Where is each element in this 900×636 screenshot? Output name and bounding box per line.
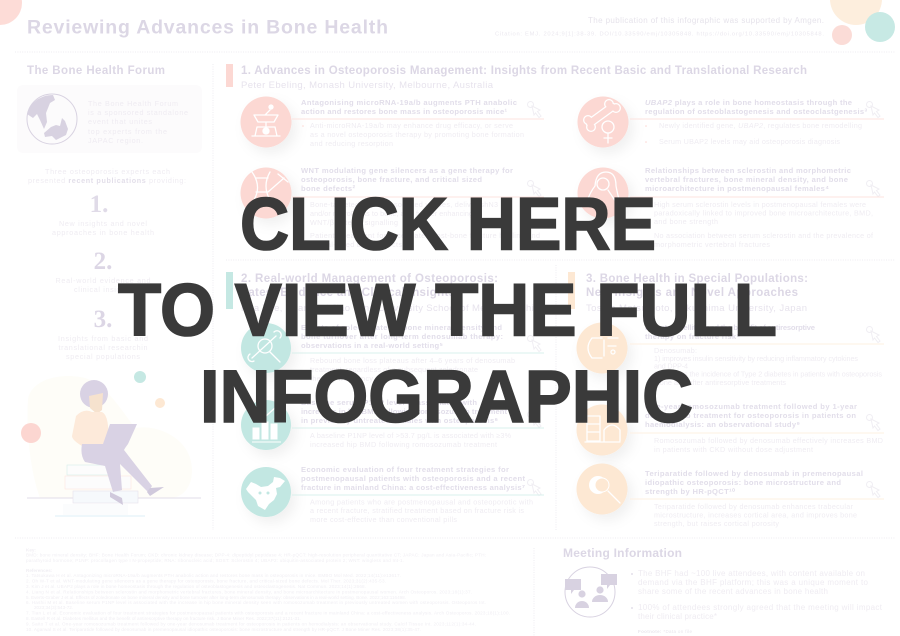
card: economic evaluation: Among patients who are postmenopausal and osteoporotic with: [310, 498, 533, 506]
card: UBAP2: UBAP2 plays a role in bone homeostasis through the: [645, 98, 852, 107]
card: WNT modulating gene silencers: [240, 166, 544, 249]
card: zoledronate: therapy frequency: [310, 374, 373, 383]
key and references: 1. Tatsukawa H et al. Antagonizing microRNA-19a/b augments PTH anabolic action and restores bone mass in osteoporosis in mice. EMBO Mol Med. 2022;14(11):e13617.: [26, 573, 401, 578]
card: teriparatide: strength by HR-pQCT¹⁰: [645, 487, 736, 496]
list item 3: translational researchin: [58, 343, 148, 352]
list item 1: 1.: [90, 191, 108, 218]
card: diabetes: [576, 322, 884, 387]
section 3 heading: New Insights and Novel Approaches: [586, 287, 798, 299]
call to action overlay: INFOGRAPHIC: [200, 355, 693, 438]
card: WNT modulating gene silencers: critical-sized bone defects: [310, 240, 402, 249]
card: diabetes: Diabetes mellitus and the benefit of antiresorptive: [645, 323, 815, 332]
card: romosozumab: [576, 402, 884, 456]
card: diabetes: alone and after antiresorptive treatments: [654, 378, 786, 387]
card: diabetes: 2) reduces the incidence of Type 2 diabetes in patients with osteoporosis: [654, 370, 882, 378]
card: zoledronate: Effects of zoledronate on bone mineral density and: [301, 323, 502, 332]
card: economic evaluation: Economic evaluation of four treatment strategies for: [301, 465, 509, 474]
icon: attendees with speech bubbles: [565, 567, 617, 617]
forum description: event that unites: [88, 117, 152, 126]
key and references: References:: [26, 568, 53, 573]
section 3 heading: 3. Bone Health in Special Populations:: [586, 273, 808, 285]
meeting bullets: The BHF had ~100 live attendees, with content available on: [638, 569, 865, 578]
support statement and citation: Citation: EMJ. 2024;9[1]:38-39. DOI/10.33590/emj/10305848. https://doi.org/10.33590/emj/10305848.: [495, 32, 824, 38]
list item 2: clinical insights: [74, 285, 132, 294]
card: WNT modulating gene silencers: Bone-targeted adeno-associated viruses, deliver shN3: [310, 200, 498, 209]
card: teriparatide: strength, but raises cortical porosity: [654, 519, 779, 528]
card: teriparatide: Teriparatide followed by denosumab enhances trabecular: [654, 502, 854, 511]
card: sclerostin: vertebral fractures, bone mineral density, and bone: [645, 175, 848, 184]
forum description: top experts from the: [88, 127, 167, 136]
card: diabetes: and DPP-4: [654, 362, 688, 370]
card: zoledronate: [241, 323, 544, 383]
forum description: JAPAC region.: [88, 136, 143, 145]
card: microRNA-19a/b: and reducing resorption: [310, 139, 393, 148]
call to action overlay: [118, 182, 777, 438]
key and references: 4. Liang N et al. Relationships between sclerostin and morphometric vertebral fractures, bone mineral density, and bone microarchitecture in postmenopausal women. Arch Osteoporos. 2023;18(1):37.: [26, 590, 472, 594]
panel: section 1 advances in osteoporosis management: [226, 64, 884, 249]
card: sclerostin: [578, 166, 884, 249]
card: diabetes: therapy on fracture risk⁸: [645, 332, 740, 341]
meeting bullets: their clinical practice*: [638, 612, 717, 621]
card: romosozumab: Romosozumab followed by denosumab effectively increases BMD: [654, 436, 883, 445]
card: teriparatide: microstructure, increases cortical area, and improves bone: [654, 510, 857, 520]
card: UBAP2: Serum UBAP2 levels may aid osteoporosis diagnosis: [659, 137, 840, 146]
card: romosozumab: in patients with CKD without dose adjustment: [654, 445, 813, 454]
card: zoledronate: bone turnover after long-term denosumab therapy:: [301, 332, 503, 341]
card: diabetes: 1) improves insulin sensitivity by reducing inflammatory cytokines: [654, 354, 858, 363]
key and references: 8. Eastell R et al. Diabetes mellitus and the benefit of antiresorptive therapy on fracture risk. J Bone Miner Res. 2022;37(11):2121-31.: [26, 616, 301, 621]
card: economic evaluation: postmenopausal patients with osteoporosis and a recent: [301, 474, 525, 483]
card: WNT modulating gene silencers: bone defects²: [301, 184, 355, 193]
card: microRNA-19a/b: Anti-microRNA-19a/b may enhance drug efficacy, or serve: [310, 121, 513, 130]
icon: bone with female symbol: [584, 100, 620, 143]
heading: meeting information: Meeting Information: [563, 546, 682, 560]
list item 3: special populations: [66, 352, 140, 361]
section 2 speaker: Hua Yue, Shanghai Jiao Tong University School of Medicine, China: [241, 303, 546, 314]
forum description: [88, 99, 188, 145]
intro text: Three osteoporosis experts each: [45, 167, 170, 176]
key and references: 10. Agarwal S et al. Teriparatide followed by denosumab in premenopausal idiopathic osteoporosis: bone microstructure and strength by HR-pQCT. J Bone Miner Res. 2023;38(1):35-47.: [26, 627, 421, 632]
key and references: BMD: bone mineral density; BHF: Bone Health Forum; CKD: chronic kidney disease; DPP-4: dipeptidyl peptidase 4; HR-pQCT: high-resolution peripheral quantitative CT; JAPAC: Japan and Asia-Pacific; PTH:: [26, 552, 486, 558]
card: teriparatide: idiopathic osteoporosis: bone microstructure and: [645, 478, 841, 487]
card: WNT modulating gene silencers: WNT modulating gene silencers as a gene therapy for: [301, 166, 513, 175]
card: sclerostin: High serum sclerostin levels in postmenopausal females were: [654, 200, 866, 209]
list item 2: Real-world evidence and: [56, 276, 150, 285]
section 1 heading: 1. Advances in Osteoporosis Management: Insights from Recent Basic and Translational Research: [241, 65, 807, 77]
card: sclerostin: Relationships between sclerostin and morphometric: [645, 166, 851, 175]
card: P1NP: in previously untreated females with osteoporosis⁶: [301, 416, 498, 425]
list item 1: New insights and novel: [59, 219, 147, 228]
card: UBAP2: [578, 96, 884, 148]
footnote: Footnote: *Data on file: [638, 629, 692, 634]
call to action overlay: TO VIEW THE FULL: [118, 268, 777, 352]
meeting bullets: share some of the recent advances in bone health: [638, 587, 828, 596]
support statement and citation: [495, 16, 824, 38]
card: P1NP: increased hip BMD following romosozumab treatment: [310, 440, 497, 449]
card: microRNA-19a/b: [240, 96, 544, 148]
key and references: 2. Oh W-T et al. WNT-modulating gene silencers as a gene therapy for osteoporosis, bone fracture, and critical-sized bone defects. Mol Ther. 2023;31(2):435-53.: [26, 578, 386, 584]
decorative corner circles: [0, 0, 895, 45]
card: P1NP: A baseline P1NP level of >53.7 pg/L is associated with ≥3%: [310, 431, 512, 440]
list item 1: [52, 191, 154, 237]
key and references: 3. Kim J et al. UBAP2 plays a role in bone homeostasis through the regulation of osteoblastogenesis and osteoclastogenesis. Nat Commun. 2023;14(1):2668.: [26, 584, 366, 589]
key and references: 2023;34(3):543-72.: [34, 605, 73, 610]
card: diabetes: Denosumab:: [654, 346, 697, 355]
card: economic evaluation: more cost-effective than conventional pills: [310, 515, 457, 524]
card: WNT modulating gene silencers: osteoporosis, bone fracture, and critical sized: [301, 175, 482, 184]
call to action overlay: CLICK HERE: [240, 182, 656, 266]
intro text: presented recent publications providing:: [28, 176, 186, 185]
list item 2: [56, 248, 150, 294]
card: zoledronate: treatment, regardless of a subsequent zoledronate: [310, 365, 478, 374]
list item 1: approaches in bone health: [52, 228, 154, 237]
icon: globe: [27, 94, 77, 144]
card: P1NP: Baseline serum P1NP level is associated with: [301, 398, 477, 407]
key and references: 7. Tian L et al. Economic evaluation of four treatment strategies for postmenopausal patients with osteoporosis and a recent fracture in mainland China: a cost-effectiveness analysis. Arch Osteoporos. 2023;18(1):100.: [26, 610, 510, 616]
section 2 heading: [241, 273, 498, 299]
key and references: 9. Saito T et al. One-year romosozumab treatment followed by one-year denosumab treatment for osteoporosis in patients on hemodialysis: an observational study. Calcif Tissue Int. 2023;112(1):34-44.: [26, 622, 476, 626]
card: economic evaluation: a recent fracture, stratified treatment based on fracture risk is: [310, 506, 524, 515]
card: sclerostin: morphometric vertebral fractures: [654, 240, 770, 249]
card: romosozumab: One-year romosozumab treatment followed by 1-year: [645, 402, 857, 411]
card: UBAP2: Newly identified gene, UBAP2, regulates bone remodelling: [659, 121, 862, 130]
card: microRNA-19a/b: action and restores bone mass in osteoporosis mice¹: [301, 107, 507, 116]
illustration: person with laptop on books: [21, 371, 201, 517]
section 2 heading: 2. Real-world Management of Osteoporosis:: [241, 273, 498, 285]
meeting bullets: 100% of attendees strongly agreed that the meeting will impact: [638, 603, 883, 612]
panel: section 2 real-world management: [226, 272, 546, 524]
title: Reviewing Advances in Bone Health: [27, 16, 388, 38]
forum description: The Bone Health Forum: [88, 99, 178, 108]
list item 3: 3.: [94, 306, 112, 333]
list item 3: [58, 306, 148, 361]
key and references: parathyroid hormone; P1NP: procollagen type I N-propeptide; RNA: ribonucleic acid; SOST: Sclerostin 4; UBAP2: ubiquitin-associated protein 2; WNT: wingless and Int-1.: [26, 558, 404, 563]
card: teriparatide: [576, 464, 884, 528]
forum description: is a sponsored standalone: [88, 108, 188, 117]
panel: meeting information: [563, 546, 883, 634]
card: sclerostin: paradoxically linked to improved bone microarchitecture, BMD,: [654, 208, 873, 218]
support statement and citation: The publication of this infographic was supported by Amgen.: [588, 16, 824, 25]
card: sclerostin: No association between serum sclerostin and the prevalence of: [654, 231, 873, 240]
card: WNT modulating gene silencers: Patients treatment for accelerated post-bone fracture healing and: [310, 231, 540, 240]
heading: forum: The Bone Health Forum: [27, 65, 165, 77]
meeting bullets: [631, 569, 883, 621]
key and references: [26, 548, 510, 632]
card: P1NP: increases in hip BMD following romosozumab treatment: [301, 407, 507, 416]
card: teriparatide: Teriparatide followed by denosumab in premenopausal: [645, 469, 863, 478]
section 1 accent bar: [226, 64, 233, 87]
meeting bullets: demand via the BHF platform; this was a unique moment to: [638, 578, 869, 587]
section 2 heading: Latest Evidence and Clinical Insights: [241, 287, 455, 299]
icon: map of China: [246, 477, 285, 510]
card: sclerostin: and bone strength: [654, 217, 718, 226]
card: P1NP: [241, 398, 544, 450]
list item 2: 2.: [94, 248, 112, 275]
card: economic evaluation: fracture in mainland China: a cost-effectiveness analysis⁷: [301, 483, 525, 492]
card: UBAP2: regulation of osteoblastogenesis and osteoclastgenesis³: [645, 107, 867, 116]
key and references: Key:: [26, 548, 36, 552]
section 3 heading: [586, 273, 808, 299]
card background: [17, 85, 202, 153]
card: zoledronate: Rebound bone loss plateaus after 4–6 years of denosumab: [310, 356, 515, 365]
card: romosozumab: denosumab treatment for osteoporosis in patients on: [645, 411, 856, 420]
card: zoledronate: observations in a real-world setting⁵: [301, 341, 443, 350]
card: economic evaluation: [241, 465, 544, 524]
key and references: 5. Everts-Graber J et al. Effects of zoledronate on bone mineral density and bone turnover after long-term denosumab therapy: observations in a real-world setting. Bone. 2022;163:116498.: [26, 595, 406, 600]
card: microRNA-19a/b: as a novel osteoporosis therapy by promoting bone formation: [310, 130, 524, 139]
card: romosozumab: haemodialysis: an observational study⁹: [645, 420, 800, 429]
card: WNT modulating gene silencers: WNT/β-catenin signalling: [310, 218, 398, 227]
panel: section 3 special populations: [568, 272, 884, 528]
intro text: [28, 167, 186, 185]
card: sclerostin: microarchitecture in postmenopausal females⁴: [645, 184, 829, 193]
section 1 speaker: Peter Ebeling, Monash University, Melbourne, Australia: [241, 80, 494, 91]
section 3 accent bar: [568, 272, 575, 309]
list item 3: Insights from basic and: [58, 334, 148, 343]
card: microRNA-19a/b: Antagonising microRNA-19a/b augments PTH anabolic: [301, 98, 517, 107]
section 2 accent bar: [226, 272, 233, 309]
panel: the bone health forum: [17, 65, 202, 517]
section 3 speaker: Toshio Matsumoto, Tokushima University, Japan: [586, 303, 807, 314]
key and references: 6. Hashii M et al. Baseline serum P1NP level is associated with the increase in hip bone mineral density seen with romosozumab treatment in previously untreated women with osteoporosis. Osteoporos Int.: [26, 600, 486, 605]
card: WNT modulating gene silencers: and/or microRNAs to bone, also further enhancing: [310, 209, 473, 218]
